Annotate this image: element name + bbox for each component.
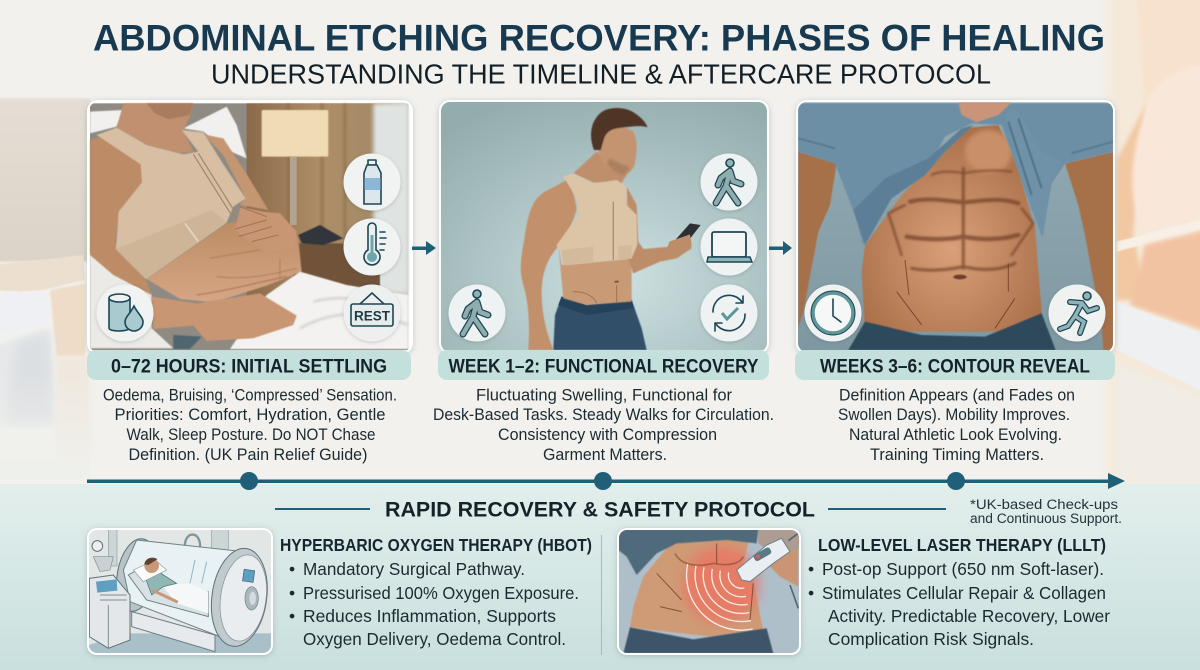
text block: weeks 3–6: Training Timing Matters.: [870, 445, 1044, 464]
icon: cycle with check: [700, 284, 758, 342]
photo: man in compression vest with phone: [441, 102, 767, 350]
text block: HBOT: [280, 535, 592, 649]
text block: HBOT: Reduces Inflammation, Supports: [303, 606, 556, 626]
panel: 0–72 hours: [87, 100, 413, 380]
icon: clock: [804, 284, 862, 342]
text block: weeks 3–6: Natural Athletic Look Evolving.: [849, 425, 1062, 444]
icon: laptop: [700, 218, 758, 276]
text block: 0–72 hours: Definition. (UK Pain Relief Guide): [128, 445, 368, 464]
phase label: WEEK 1–2: FUNCTIONAL RECOVERY: [448, 356, 759, 378]
text block: LLLT: Stimulates Cellular Repair & Collagen: [822, 583, 1106, 603]
phase label: [438, 350, 769, 380]
text block: LLLT: Post-op Support (650 nm Soft-laser).: [822, 559, 1104, 579]
icon: water bottle: [344, 154, 400, 210]
timeline: [87, 472, 1125, 490]
text block: 0–72 hours: Oedema, Bruising, ‘Compressed’ Sensation.: [103, 386, 397, 404]
text block: LLLT: •: [808, 559, 814, 579]
text block: weeks 3–6: Swollen Days). Mobility Improves.: [838, 405, 1070, 424]
text block: 0–72 hours: Walk, Sleep Posture. Do NOT Chase: [126, 425, 376, 444]
text block: HBOT: Oxygen Delivery, Oedema Control.: [303, 629, 566, 649]
icon: thermometer: [344, 218, 400, 276]
text block: HBOT: Mandatory Surgical Pathway.: [303, 559, 525, 579]
text block: weeks 3–6: [838, 386, 1075, 464]
text block: HBOT: •: [289, 606, 295, 626]
text block: LLLT: Complication Risk Signals.: [828, 629, 1034, 649]
photo: patient resting in compression garment: [90, 103, 408, 350]
phase label: 0–72 HOURS: INITIAL SETTLING: [111, 356, 387, 378]
text block: LLLT: LOW-LEVEL LASER THERAPY (LLLT): [818, 535, 1106, 555]
icon: tissue roll and droplet: [96, 284, 154, 342]
text block: week 1–2: Consistency with Compression: [498, 425, 717, 444]
text block: 0–72 hours: [103, 386, 397, 464]
arrow: phase 2 to 3: [769, 241, 792, 255]
note: UK check-ups: *UK-based Check-ups: [970, 497, 1118, 512]
heading: rapid recovery: RAPID RECOVERY & SAFETY PROTOCOL: [385, 498, 815, 522]
icon: rest sign: REST: [354, 308, 391, 324]
text block: LLLT: Activity. Predictable Recovery, Lower: [828, 606, 1110, 626]
icon: rest sign: [344, 284, 400, 342]
panel: week 1–2: [438, 100, 769, 380]
text block: HBOT: HYPERBARIC OXYGEN THERAPY (HBOT): [280, 535, 592, 555]
icon: runner: [1048, 284, 1106, 342]
icon: walking person small: [448, 284, 506, 342]
text block: 0–72 hours: Priorities: Comfort, Hydration, Gentle: [114, 405, 386, 424]
note: UK check-ups: and Continuous Support.: [970, 511, 1122, 526]
icon: walking person: [700, 154, 758, 210]
image: laser therapy on abdomen: [617, 528, 801, 655]
text block: LLLT: •: [808, 583, 814, 603]
text block: HBOT: Pressurised 100% Oxygen Exposure.: [303, 583, 579, 603]
panel: weeks 3–6: [795, 100, 1115, 380]
text block: LLLT: [808, 535, 1110, 649]
subtitle: UNDERSTANDING THE TIMELINE & AFTERCARE PROTOCOL: [211, 58, 991, 90]
text block: week 1–2: Garment Matters.: [543, 445, 667, 464]
text block: week 1–2: Desk-Based Tasks. Steady Walks for Circulation.: [433, 405, 774, 424]
photo: lifted shirt revealing abdomen: [798, 102, 1113, 351]
note: UK check-ups: [970, 497, 1122, 526]
arrow: phase 1 to 2: [412, 241, 436, 255]
text block: HBOT: •: [289, 559, 295, 579]
title: ABDOMINAL ETCHING RECOVERY: PHASES OF HEALING: [93, 16, 1105, 58]
phase label: [87, 350, 411, 380]
phase label: [795, 350, 1115, 380]
text block: weeks 3–6: Definition Appears (and Fades on: [839, 386, 1075, 404]
text block: week 1–2: [433, 386, 774, 464]
phase label: WEEKS 3–6: CONTOUR REVEAL: [820, 356, 1090, 378]
text block: week 1–2: Fluctuating Swelling, Functional for: [476, 386, 732, 404]
image: hyperbaric chamber: [87, 528, 273, 655]
text block: HBOT: •: [289, 583, 295, 603]
